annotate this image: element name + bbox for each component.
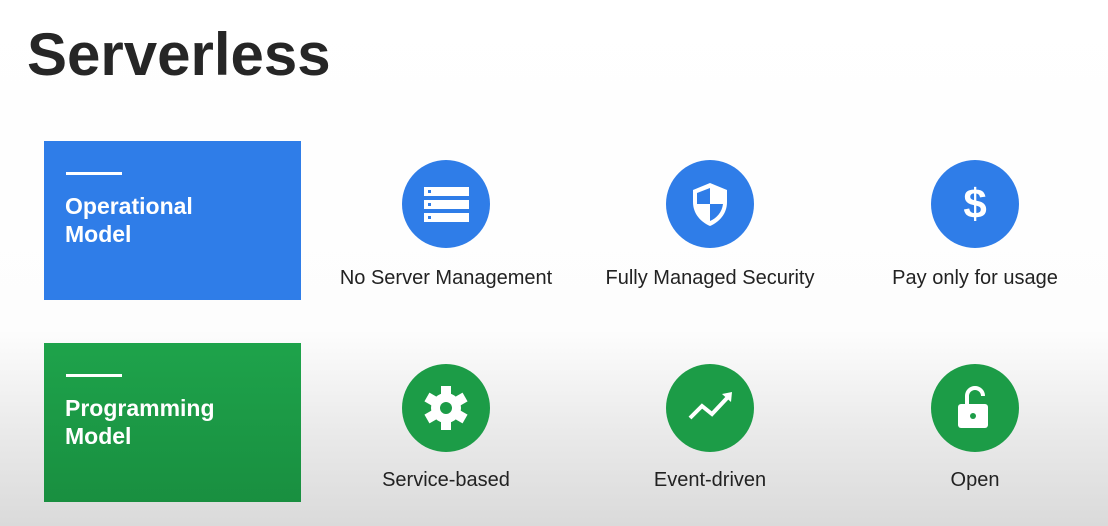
panel: operational model: Model — [65, 221, 131, 247]
panel: operational model: Operational — [65, 193, 193, 219]
panel: programming model: Model — [65, 423, 131, 449]
panel: programming model — [44, 343, 301, 502]
icon: dollar — [931, 160, 1019, 248]
label: fully managed security: Fully Managed Security — [606, 267, 814, 289]
icon: open lock — [931, 364, 1019, 452]
label: open: Open — [951, 469, 999, 491]
icon: gear — [402, 364, 490, 452]
label: event-driven: Event-driven — [654, 469, 766, 491]
label: pay only for usage: Pay only for usage — [892, 267, 1058, 289]
icon: shield — [666, 160, 754, 248]
icon: dollar: $ — [963, 180, 987, 227]
panel: operational model — [44, 141, 301, 300]
panel: programming model: Programming — [65, 395, 215, 421]
label: no server management: No Server Management — [340, 267, 552, 289]
label: service-based: Service-based — [382, 469, 510, 491]
icon: trend — [666, 364, 754, 452]
icon: server — [402, 160, 490, 248]
title: Serverless — [27, 21, 331, 88]
